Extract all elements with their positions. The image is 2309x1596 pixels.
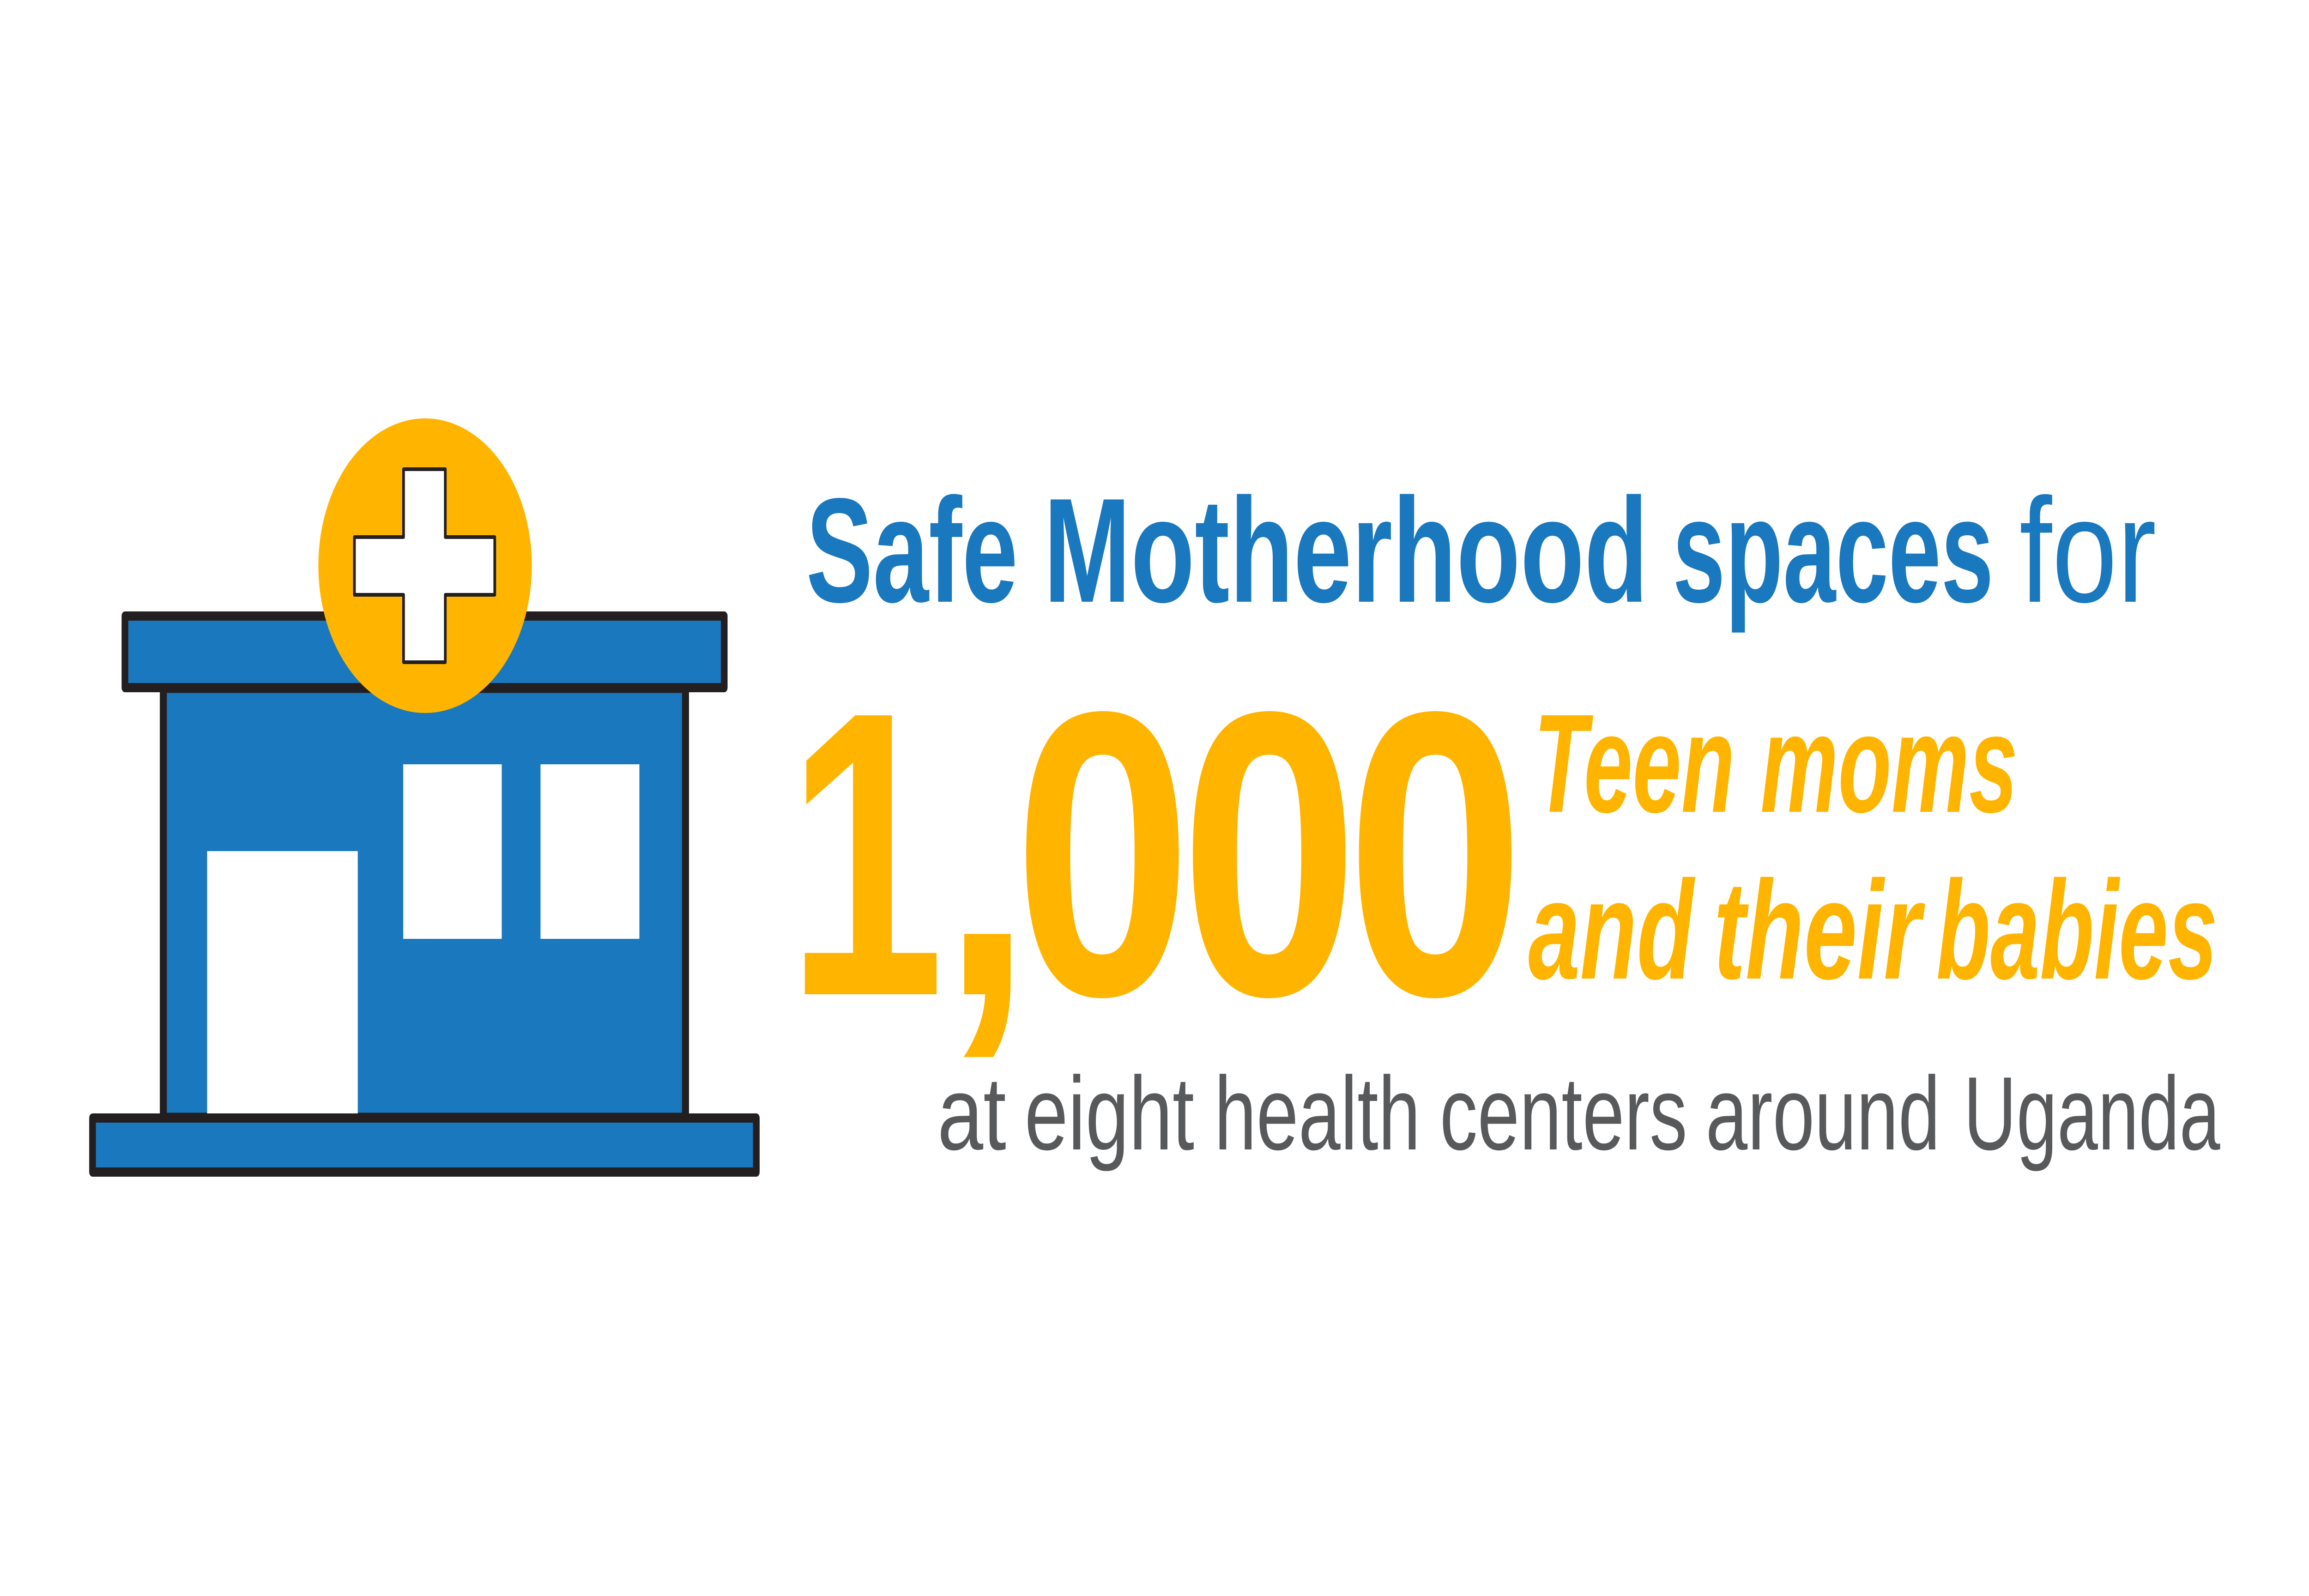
- babies label: and: [1528, 852, 1697, 1009]
- door: [207, 851, 358, 1114]
- location subtitle: at: [937, 1055, 1006, 1172]
- teen moms label: [1534, 685, 2018, 842]
- location subtitle: Uganda: [1964, 1055, 2220, 1172]
- teen moms label: moms: [1760, 685, 2018, 842]
- heading: Motherhood: [1044, 467, 1648, 634]
- big number: 0: [1346, 628, 1525, 1081]
- heading: Safe: [806, 467, 1018, 634]
- big number: [787, 628, 1525, 1081]
- icon: medical cross: [355, 469, 495, 662]
- heading: spaces: [1673, 467, 1994, 634]
- location subtitle: [937, 1055, 2220, 1172]
- babies label: [1528, 852, 2218, 1009]
- big number: ,: [941, 628, 1033, 1081]
- window right: [540, 764, 640, 939]
- heading: [806, 467, 2156, 634]
- building body: [163, 688, 685, 1118]
- icon: health center building: [92, 418, 756, 1172]
- location subtitle: around: [1706, 1055, 1940, 1172]
- babies label: their: [1714, 852, 1925, 1009]
- window left: [403, 764, 502, 939]
- roof: [125, 616, 724, 688]
- big number: 1: [787, 628, 944, 1081]
- heading: for: [2019, 467, 2156, 634]
- location subtitle: health: [1214, 1055, 1420, 1172]
- babies label: babies: [1936, 852, 2218, 1009]
- big number: 0: [1014, 628, 1192, 1081]
- big number: 0: [1180, 628, 1359, 1081]
- location subtitle: centers: [1440, 1055, 1687, 1172]
- teen moms label: Teen: [1534, 685, 1735, 842]
- base: [92, 1118, 756, 1172]
- location subtitle: eight: [1025, 1055, 1194, 1172]
- icon: yellow circle: [318, 418, 532, 713]
